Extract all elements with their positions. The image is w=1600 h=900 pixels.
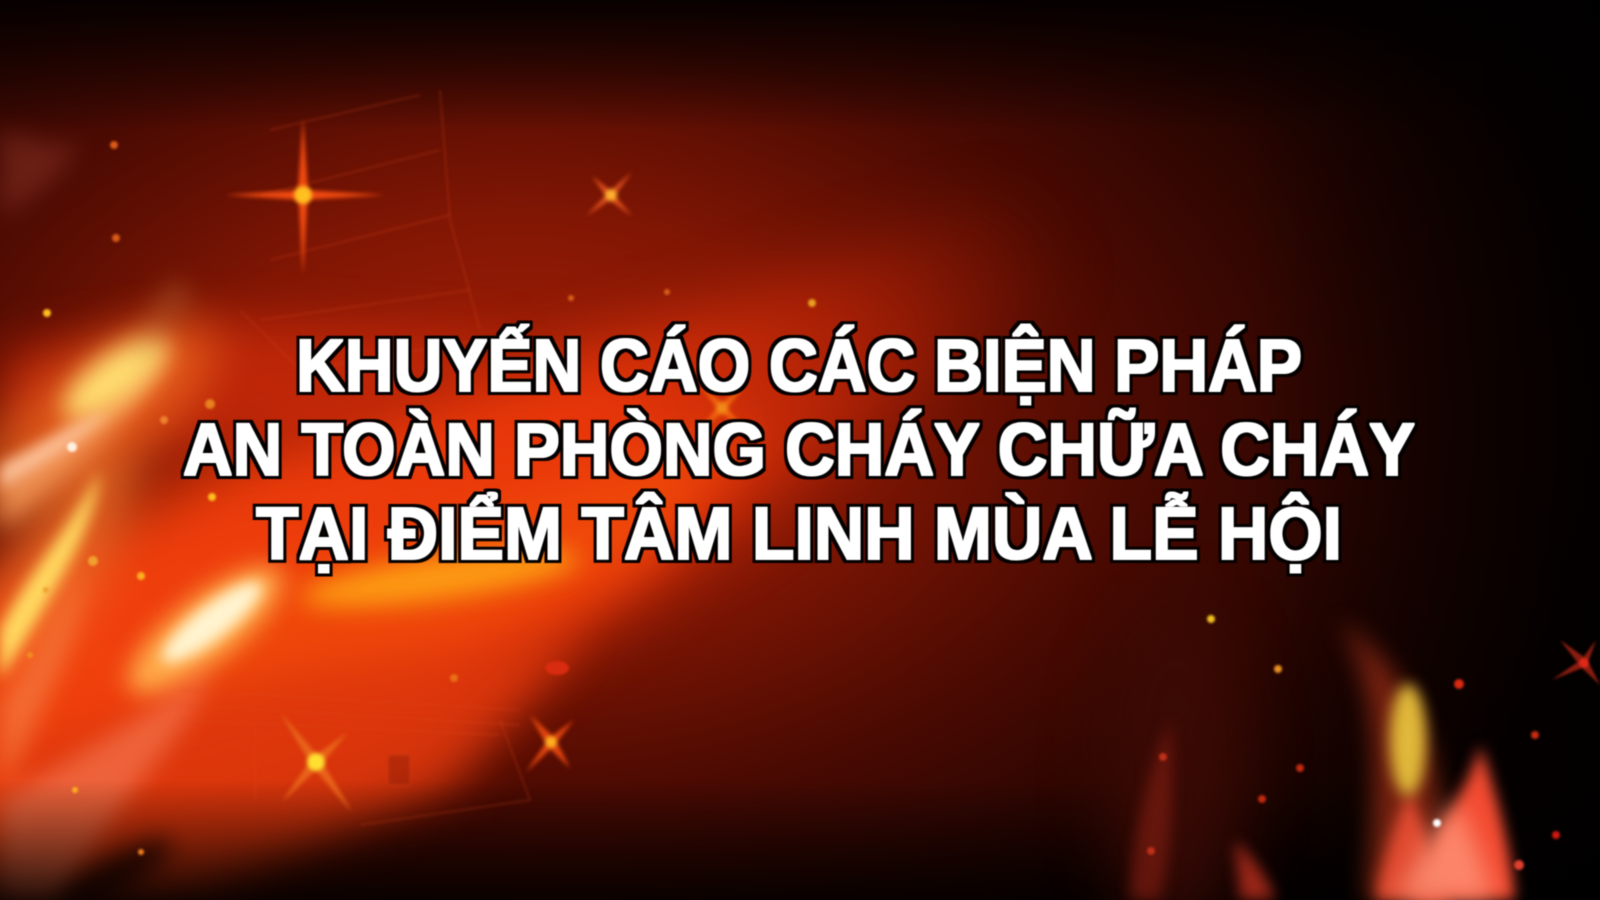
sparkle: top cross	[225, 118, 385, 275]
diagonal fire band	[0, 195, 1120, 900]
ember dots	[27, 141, 1560, 870]
left flames	[0, 130, 300, 900]
title line 2: AN TOÀN PHÒNG CHÁY CHỮA CHÁY	[183, 408, 1415, 491]
sparkle: lower middle x	[526, 715, 574, 772]
sparkle: behind title	[700, 385, 745, 430]
sparkle: lower left x	[280, 712, 352, 812]
pagoda silhouette	[180, 90, 530, 825]
star sparkles	[225, 118, 1600, 812]
title line 3: TẠI ĐIỂM TÂM LINH MÙA LỄ HỘI	[256, 492, 1342, 575]
title	[183, 324, 1415, 575]
sparkle: small x top	[586, 172, 632, 216]
title line 1: KHUYẾN CÁO CÁC BIỆN PHÁP	[296, 324, 1302, 407]
right flames	[1105, 600, 1515, 900]
sparkle: right edge x	[1552, 640, 1600, 685]
